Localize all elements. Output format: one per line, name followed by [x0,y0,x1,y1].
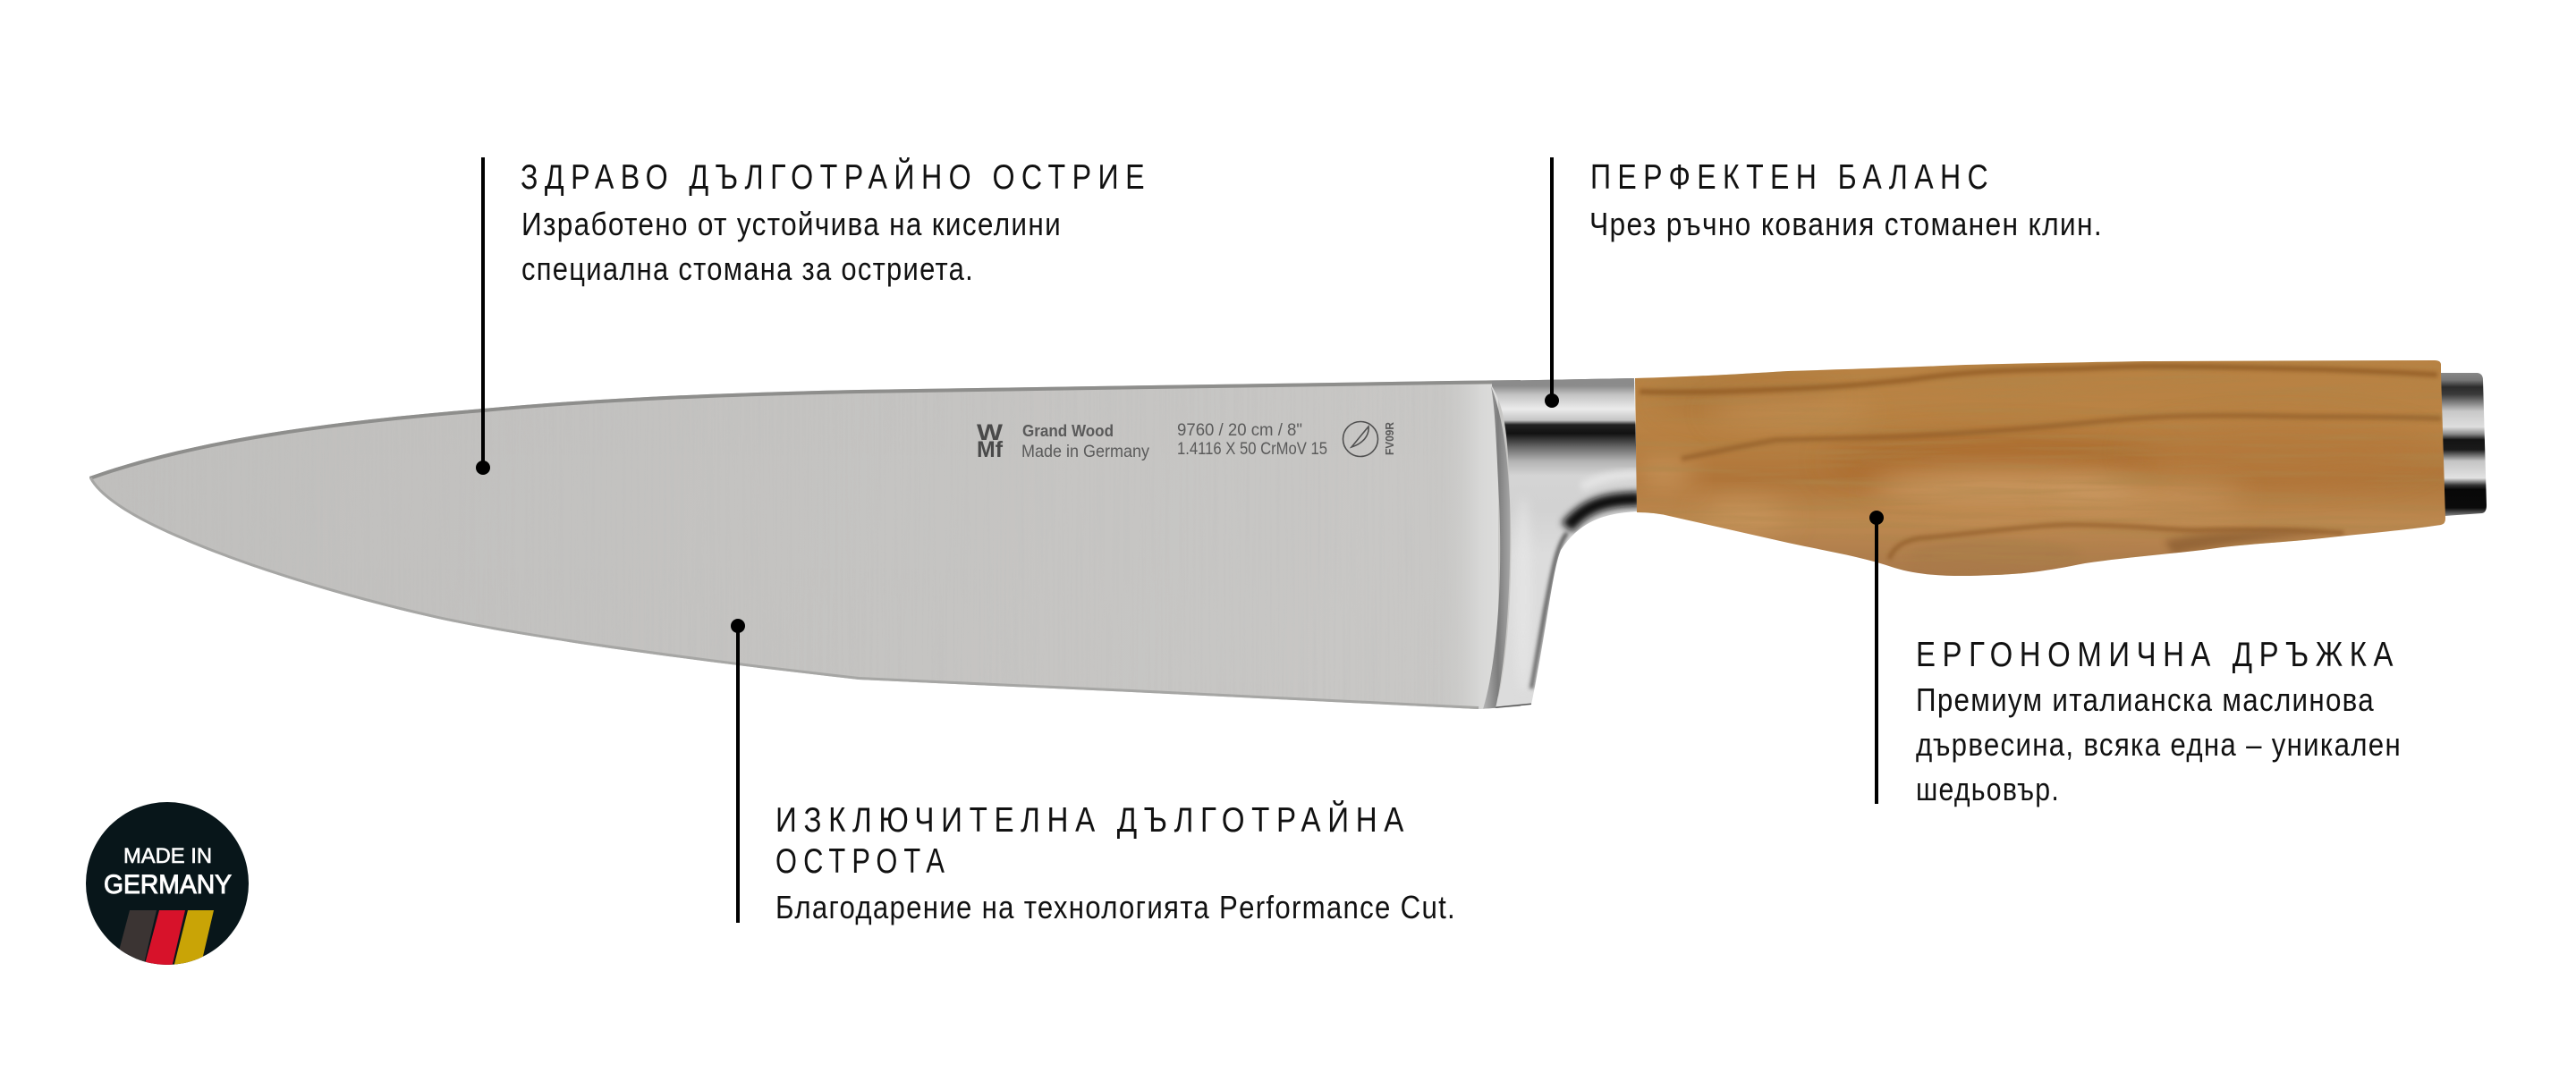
heading: ИЗКЛЮЧИТЕЛНА ДЪЛГОТРАЙНА [775,799,1411,840]
engraving: model: 9760 / 20 cm / 8" [1177,421,1302,440]
bolster [1485,376,1641,711]
heading [775,799,1411,881]
description: дървесина, всяка една – уникален [1916,726,2402,763]
description: специална стомана за остриета. [521,250,974,287]
description: Благодарение на технологията Performance Cut. [775,889,1456,925]
WMF logo [977,420,1004,462]
heading: ПЕРФЕКТЕН БАЛАНС [1590,158,1995,197]
heading: ЕРГОНОМИЧНА ДРЪЖКА [1916,636,2400,674]
pointer line [1869,511,1884,804]
end cap [2440,373,2487,516]
callout: perfect balance [1545,157,2103,408]
callout: ergonomic handle [1869,511,2402,807]
WMF logo: W [977,420,1003,445]
callout: lasting sharpness [731,619,1456,925]
knife blade [80,376,1530,715]
description: Чрез ръчно кования стоманен клин. [1589,206,2103,242]
pointer line [1545,157,1559,408]
heading: ОСТРОТА [775,842,951,881]
pointer line [476,157,490,475]
flag stripes [114,910,214,967]
engraving: made in Germany: Made in Germany [1021,443,1149,461]
description [521,206,1062,287]
engraving: steel: 1.4116 X 50 CrMoV 15 [1177,440,1327,459]
knife [80,358,2487,715]
badge text: MADE IN [123,844,212,868]
heading: ЗДРАВО ДЪЛГОТРАЙНО ОСТРИЕ [521,156,1151,197]
blade engraving [977,420,1396,462]
WMF logo: Mf [977,437,1004,462]
icon: knife in circle [1343,422,1377,456]
description: шедьовър. [1916,771,2060,807]
pointer line [731,619,745,923]
callout: durable blade [476,156,1151,475]
description: Премиум италианска маслинова [1916,681,2375,718]
olive wood handle [1628,358,2451,581]
engraving: code: FV09R [1383,421,1396,455]
badge text [104,844,232,900]
description: Изработено от устойчива на киселини [521,206,1062,242]
engraving: product name: Grand Wood [1022,422,1114,440]
badge: made in Germany [86,802,249,967]
badge text: GERMANY [104,870,232,900]
description [1916,681,2402,807]
